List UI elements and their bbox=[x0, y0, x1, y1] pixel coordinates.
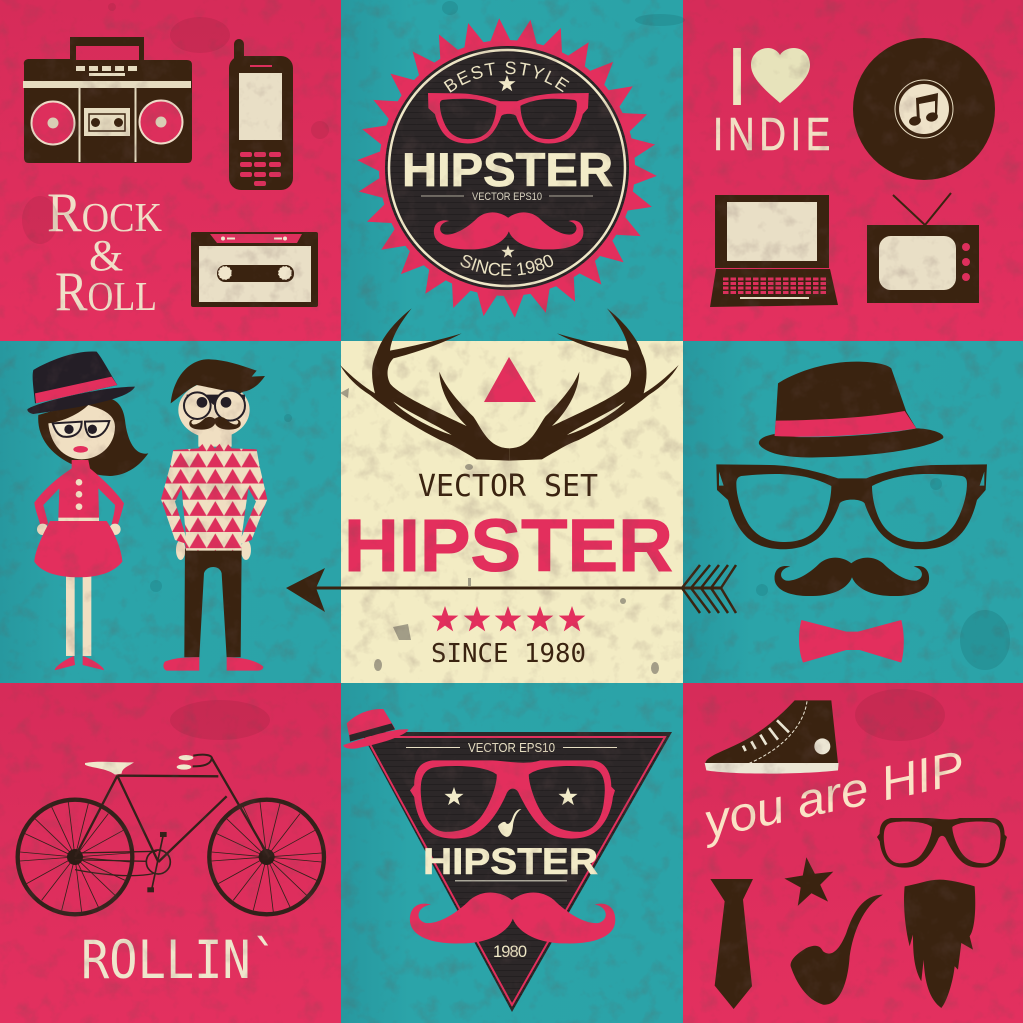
label: vector eps10: VECTOR EPS10 bbox=[468, 741, 555, 755]
badge: dark inverted triangle bbox=[361, 732, 672, 1012]
heading: hipster: HIPSTER bbox=[402, 143, 613, 196]
heading: rock and roll: ROCK bbox=[47, 182, 162, 244]
badge text: since 1980: SINCE 1980 bbox=[460, 254, 554, 276]
icon: boombox bbox=[23, 37, 192, 163]
icon: moustache bbox=[775, 558, 929, 596]
text: 1980: 1980 bbox=[493, 943, 527, 961]
icon: vinyl record bbox=[853, 38, 995, 180]
badge: pink starburst bbox=[356, 17, 658, 319]
icon: stars in lenses bbox=[444, 787, 578, 805]
icon: pipe bbox=[791, 895, 883, 1005]
heading: hipster: HIPSTER bbox=[423, 841, 598, 882]
icon: big pink moustache bbox=[410, 893, 615, 944]
icon: aviator glasses bbox=[877, 818, 1007, 868]
panel: hipster round badge bbox=[341, 0, 657, 341]
icon: five stars bbox=[432, 606, 585, 631]
icon: star bbox=[782, 854, 837, 907]
icon: star bottom bbox=[501, 245, 515, 258]
icons: sneaker glasses tie star pipe beard bbox=[705, 700, 1007, 1009]
text: i love: I bbox=[726, 30, 749, 123]
icon: mobile phone bbox=[229, 39, 293, 190]
heading: rock and roll bbox=[47, 182, 162, 323]
text: vector set: VECTOR SET bbox=[418, 469, 598, 504]
icon: large glasses bbox=[716, 464, 987, 549]
icon: laptop bbox=[710, 195, 838, 307]
arrow bbox=[286, 565, 736, 613]
label: vector eps10: VECTOR EPS10 bbox=[472, 191, 542, 203]
icon: cassette tape bbox=[191, 232, 318, 307]
icon: beard bbox=[904, 880, 975, 1008]
panel: you are hip bbox=[683, 683, 1023, 1023]
heading: rock and roll: ROLL bbox=[55, 261, 157, 323]
badge text: best style: BEST STYLE bbox=[444, 62, 570, 93]
icon: pink aviator glasses bbox=[410, 760, 615, 839]
icon: small pipe bbox=[498, 809, 522, 837]
icon: pink triangle bbox=[484, 357, 536, 402]
icon: antlers bbox=[340, 308, 679, 461]
icon: small pink hat bbox=[343, 709, 408, 749]
speckles bbox=[340, 388, 659, 674]
text: you are hip: you are HIP bbox=[696, 742, 969, 849]
panel: rollin bicycle bbox=[0, 683, 341, 1023]
icon: pink moustache bbox=[434, 212, 583, 249]
panel: i love indie bbox=[683, 0, 1023, 341]
icon: sneaker bbox=[705, 700, 839, 774]
icon: tie bbox=[710, 879, 753, 1009]
badge: dark circle with cream ring bbox=[385, 46, 629, 290]
text: since 1980: SINCE 1980 bbox=[431, 639, 586, 669]
panel: rock and roll bbox=[0, 0, 341, 341]
heading: rock and roll: & bbox=[89, 231, 123, 280]
icon: star top bbox=[498, 75, 516, 91]
text: rollin: ROLLIN` bbox=[81, 930, 279, 991]
icon: television bbox=[867, 193, 979, 303]
heading: hipster: HIPSTER bbox=[344, 504, 673, 587]
panel: central vector set bbox=[286, 308, 736, 683]
panel: hipster triangle badge bbox=[341, 683, 683, 1023]
icon: pink glasses bbox=[428, 93, 589, 143]
panel: hat glasses moustache bbox=[683, 341, 1023, 683]
icon: bicycle bbox=[18, 755, 324, 914]
text: indie: INDIE bbox=[713, 108, 835, 160]
figure: girl bbox=[27, 351, 148, 670]
icon: bow tie bbox=[799, 620, 904, 663]
text: i love bbox=[726, 30, 810, 123]
figure: boy bbox=[161, 359, 267, 671]
panel: hipster couple bbox=[0, 341, 341, 683]
icon: brown hat bbox=[759, 362, 943, 457]
